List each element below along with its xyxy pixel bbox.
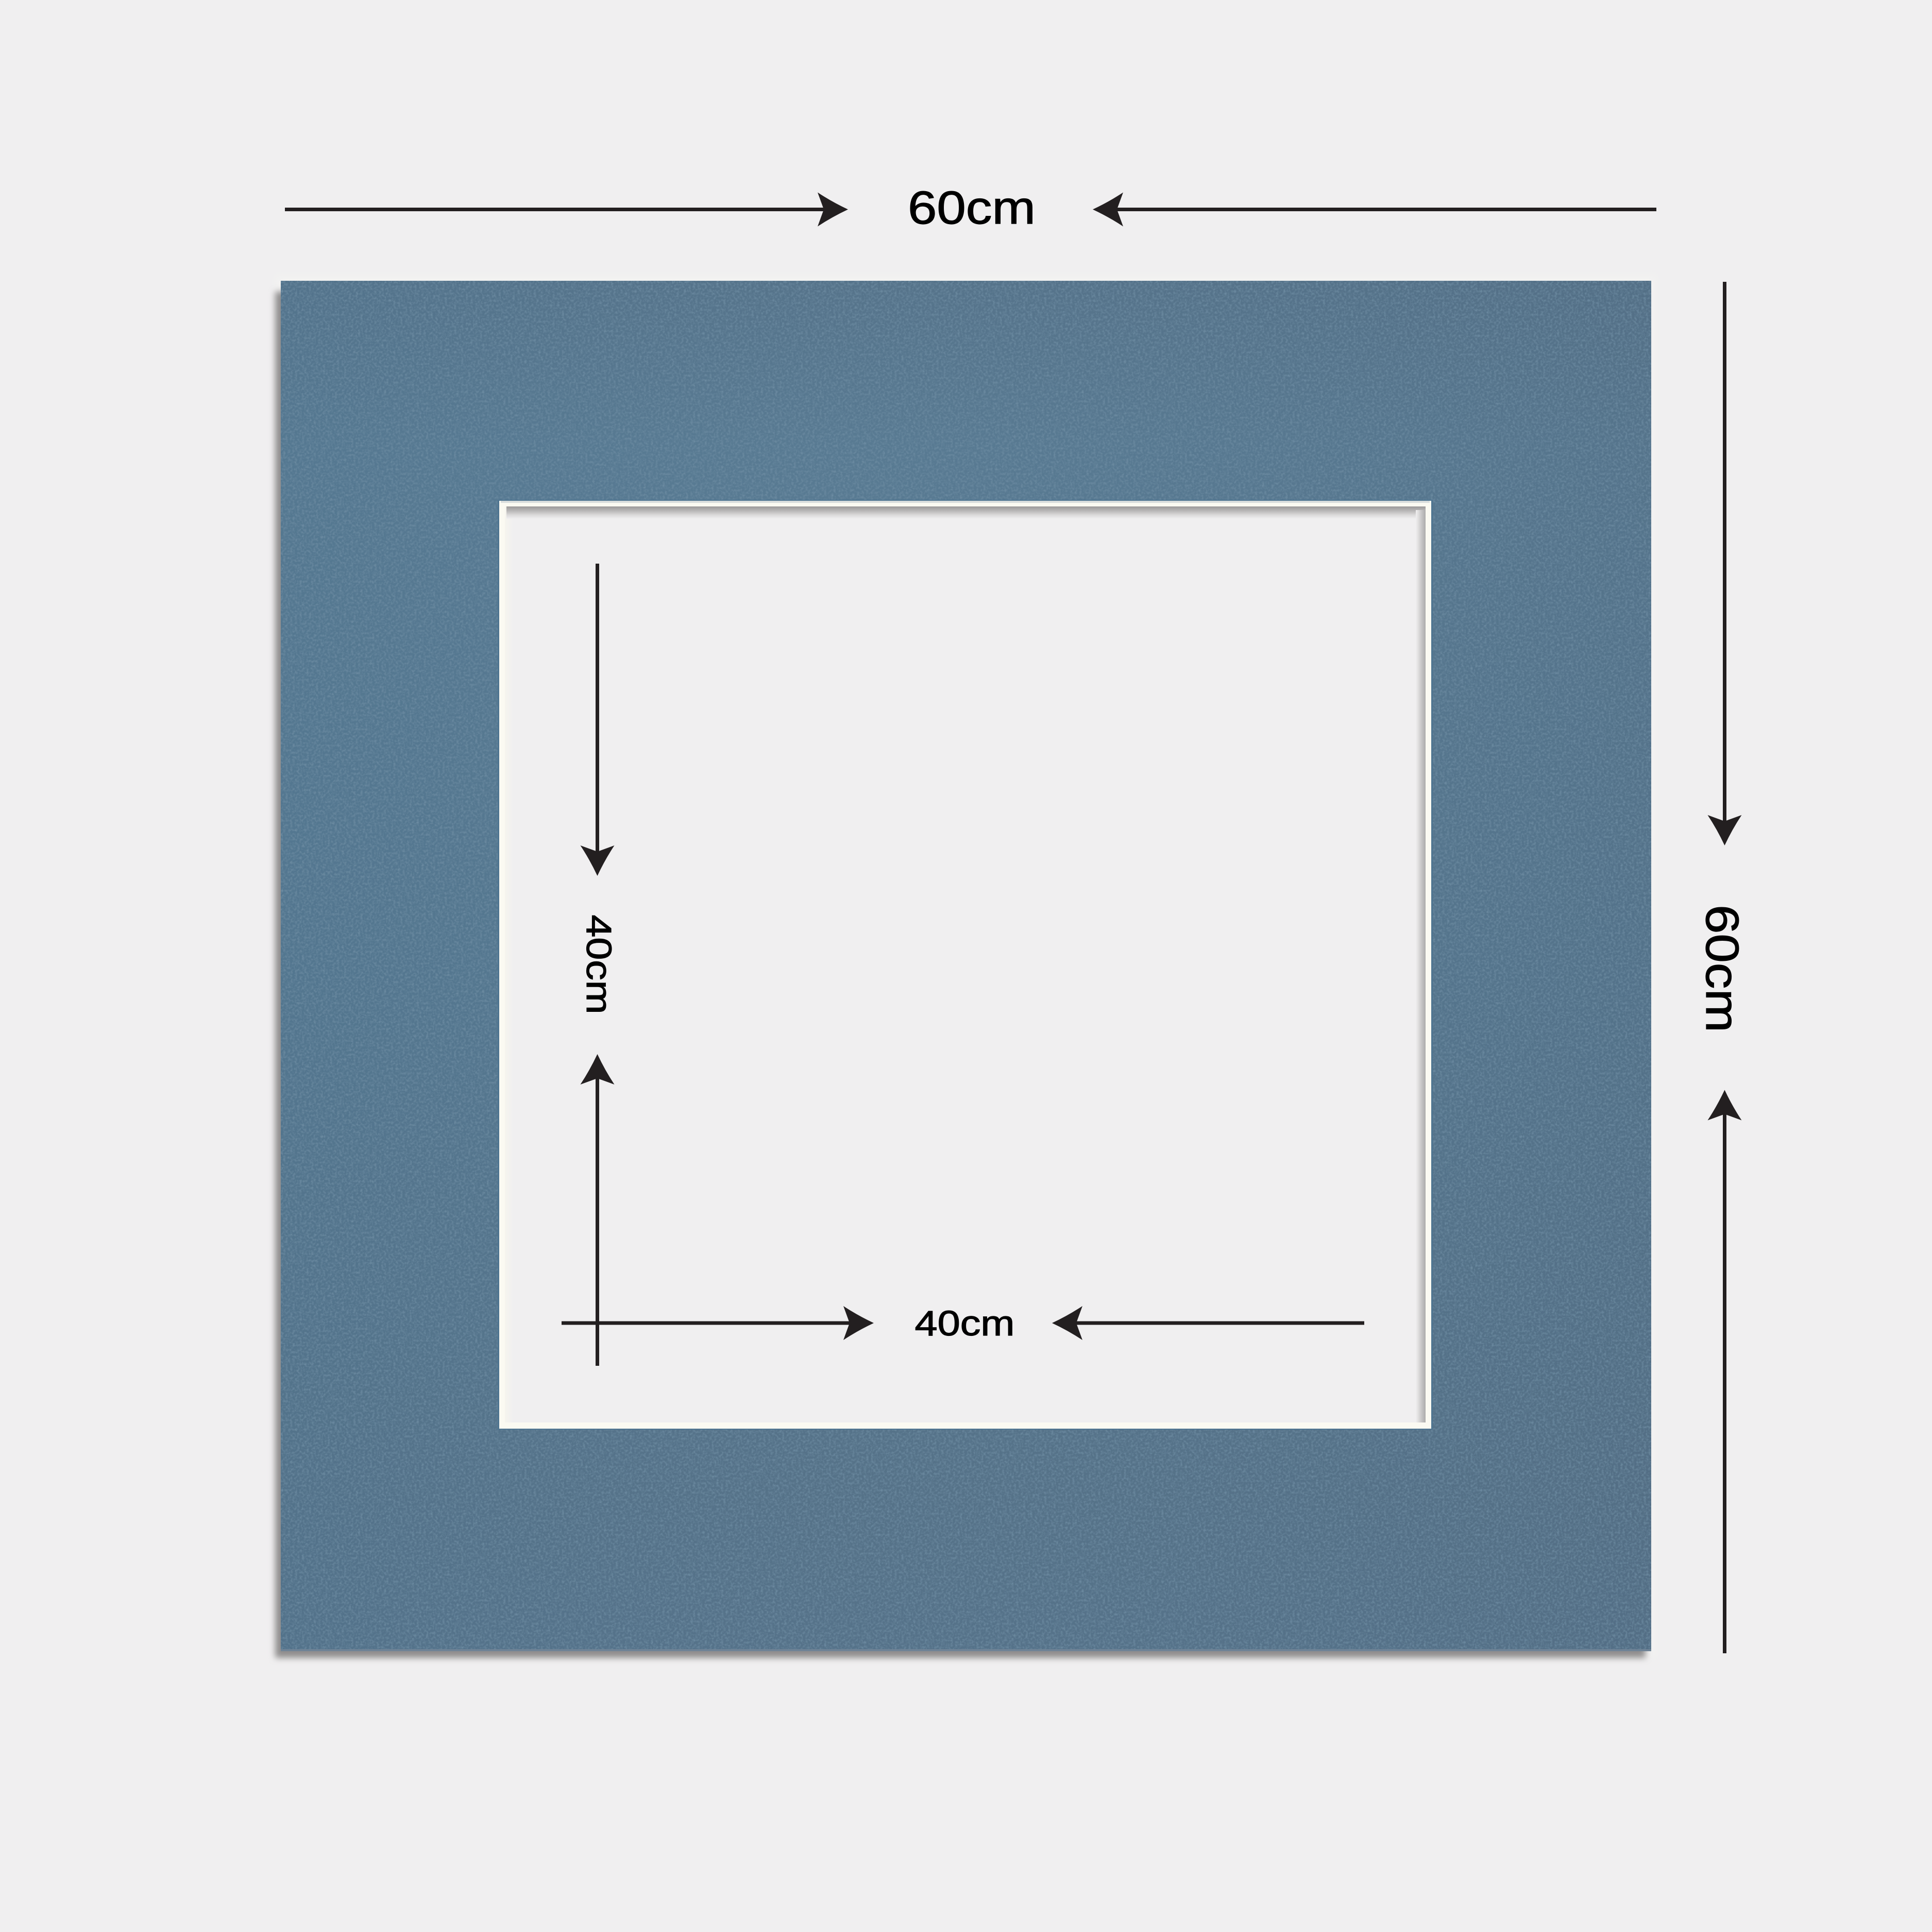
left bevel tint	[505, 506, 513, 1422]
window opening	[505, 506, 1426, 1422]
board paper grain	[281, 281, 1651, 1651]
board drop shadow	[275, 292, 1646, 1658]
bevel dark outline	[498, 500, 1433, 1430]
label: inner width 40cm: 40cm	[915, 1303, 1015, 1343]
label: outer width 60cm: 60cm	[908, 182, 1036, 234]
board surface	[281, 281, 1651, 1651]
arrow: top left pointing right	[285, 193, 848, 227]
board bottom edge	[281, 1649, 1651, 1651]
inner shadow top	[506, 506, 1426, 519]
arrow: inner bottom pointing right	[562, 1306, 874, 1340]
arrow: inner bottom pointing left	[1052, 1306, 1364, 1340]
bevel top highlight	[501, 501, 1430, 503]
board tone variation	[281, 281, 1651, 1651]
arrow: top right pointing left	[1093, 193, 1656, 227]
panel: blue mat board	[275, 275, 1657, 1658]
cream bevel	[499, 501, 1431, 1429]
label: outer height 60cm: 60cm	[1696, 905, 1748, 1032]
panel: window cut-out with bevel	[498, 500, 1433, 1430]
arrow: right side pointing down	[1707, 282, 1741, 845]
inner shadow right	[1416, 510, 1426, 1422]
light halo around board	[275, 275, 1657, 1657]
arrow: inner left pointing up	[580, 1054, 614, 1366]
arrow: right side pointing up	[1707, 1090, 1741, 1653]
arrow: inner left pointing down	[580, 564, 614, 876]
label: inner height 40cm: 40cm	[579, 915, 619, 1014]
